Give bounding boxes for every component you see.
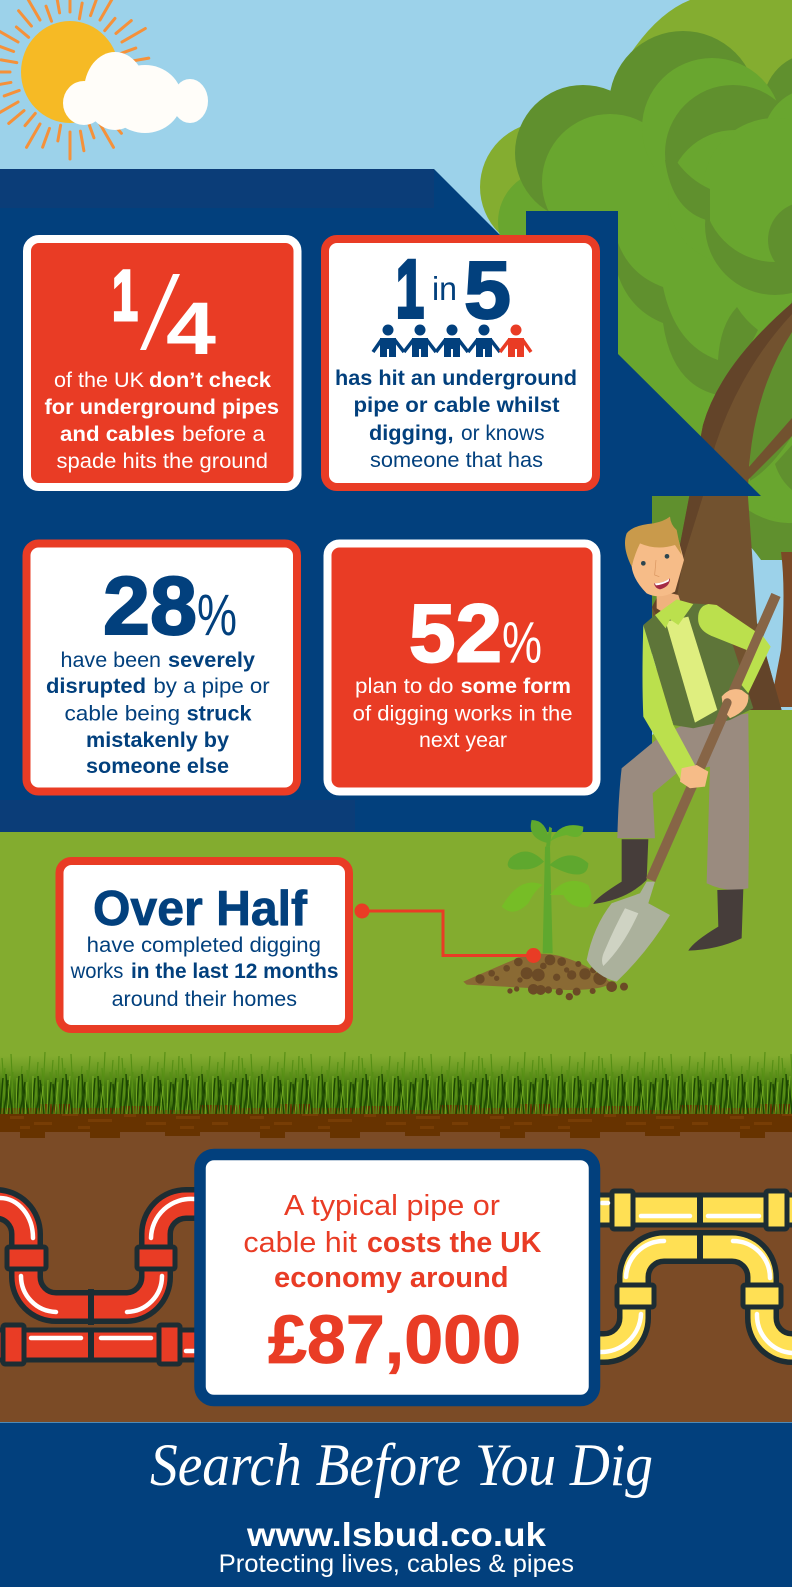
big stat 1 in 5	[396, 244, 511, 336]
trousers	[617, 713, 749, 890]
footer band	[0, 1422, 792, 1587]
text: severely disrupted: have been	[60, 649, 161, 672]
text: has hit an underground	[335, 367, 577, 472]
panel: cost	[200, 1154, 594, 1400]
text: digging works: works	[70, 960, 123, 983]
spade blade	[587, 882, 670, 982]
text: typical pipe: costs the UK	[367, 1227, 541, 1259]
spade handle	[651, 595, 776, 880]
sky background	[0, 0, 792, 860]
big stat 52%	[409, 586, 542, 680]
text: severely disrupted: disrupted	[46, 675, 146, 698]
icon: cloud	[63, 52, 208, 133]
panel: 28 percent	[26, 544, 297, 792]
heading: over half: Over Half	[93, 882, 308, 936]
text: don't check: for underground pipes	[44, 396, 279, 419]
house shape	[0, 169, 761, 832]
text: digging works: around their homes	[112, 988, 297, 1011]
footer url: www.lsbud.co.uk	[246, 1516, 547, 1553]
text: don't check: and cables	[60, 423, 175, 446]
tree foliage	[480, 0, 792, 620]
text: don't check: of the UK	[54, 369, 144, 392]
text: severely disrupted: someone else	[86, 755, 229, 778]
big stat 28%: 28	[103, 559, 197, 652]
text: some form of digging: next year	[419, 729, 507, 752]
text: typical pipe: A typical pipe or	[284, 1190, 500, 1222]
text: severely disrupted: cable being	[64, 702, 180, 726]
hair	[625, 517, 682, 567]
eyes and mouth	[641, 554, 670, 589]
ground: lawn	[0, 710, 792, 1120]
big stat 1 in 5: in	[432, 270, 457, 307]
text: some form of digging: some form	[461, 675, 571, 698]
footer title: Search Before You Dig	[150, 1432, 653, 1498]
big stat 52%: %	[502, 610, 542, 676]
text: has hit an underground: digging,	[369, 422, 454, 445]
text: don't check: spade hits the ground	[56, 450, 268, 473]
footer tagline: Protecting lives, cables & pipes	[219, 1550, 574, 1578]
yellow pipes	[590, 1191, 792, 1353]
big stat 52%: 52	[409, 586, 502, 680]
soil mound	[463, 954, 628, 1000]
hands	[680, 765, 708, 788]
text: typical pipe: cable hit	[243, 1227, 357, 1259]
text: some form of digging: plan to do	[355, 675, 454, 698]
panel: one quarter	[27, 239, 298, 487]
collar	[655, 599, 693, 628]
text: don't check	[44, 369, 279, 473]
text: typical pipe: economy around	[274, 1262, 509, 1294]
left sleeve	[642, 625, 695, 782]
text: digging works: have completed digging	[87, 934, 321, 957]
red pipes	[0, 1198, 205, 1364]
text: has hit an underground: has hit an underground	[335, 367, 577, 390]
big stat 1 in 5: 5	[464, 245, 511, 336]
tree trunk	[652, 303, 792, 727]
right sleeve	[698, 604, 771, 693]
vest	[643, 603, 753, 728]
big stat 1/4: 1	[112, 257, 138, 336]
panel: over half	[60, 861, 349, 1029]
connector line	[354, 904, 541, 963]
text: has hit an underground: pipe or cable whilst	[354, 394, 560, 417]
text: some form of digging: of digging works in the	[353, 702, 573, 726]
seedling	[502, 820, 591, 953]
face	[632, 533, 684, 596]
worker with spade	[587, 517, 776, 982]
text: don't check: don’t check	[149, 369, 271, 392]
boots	[593, 839, 648, 904]
panel: 52 percent	[328, 544, 596, 792]
text: severely disrupted: mistakenly by	[86, 729, 229, 752]
icon: five people	[373, 324, 531, 357]
panel: one in five	[325, 239, 596, 487]
big stat 28%: %	[197, 583, 237, 648]
text: has hit an underground: someone that has	[370, 449, 543, 472]
shirt front	[666, 617, 717, 723]
big stat 28%	[103, 559, 237, 652]
text: don't check: before a	[182, 423, 265, 446]
text: severely disrupted: by a pipe or	[153, 675, 270, 698]
icon: sun	[0, 0, 157, 159]
text: some form of digging	[353, 675, 573, 752]
text: severely disrupted: severely	[168, 649, 255, 672]
text: severely disrupted: struck	[187, 702, 252, 726]
big stat: 87,000 pounds: £87,000	[268, 1301, 521, 1378]
neck	[657, 590, 680, 617]
text: typical pipe	[243, 1190, 541, 1294]
big stat 1/4	[112, 257, 216, 370]
text: severely disrupted	[46, 649, 270, 778]
text: digging works	[70, 934, 338, 1011]
text: digging works: in the last 12 months	[131, 960, 338, 983]
grass strip	[0, 1046, 792, 1114]
underground soil	[0, 1103, 792, 1422]
big stat 1/4: 4	[166, 287, 216, 370]
big stat 1 in 5: 1	[396, 244, 424, 335]
text: has hit an underground: or knows	[461, 422, 544, 445]
